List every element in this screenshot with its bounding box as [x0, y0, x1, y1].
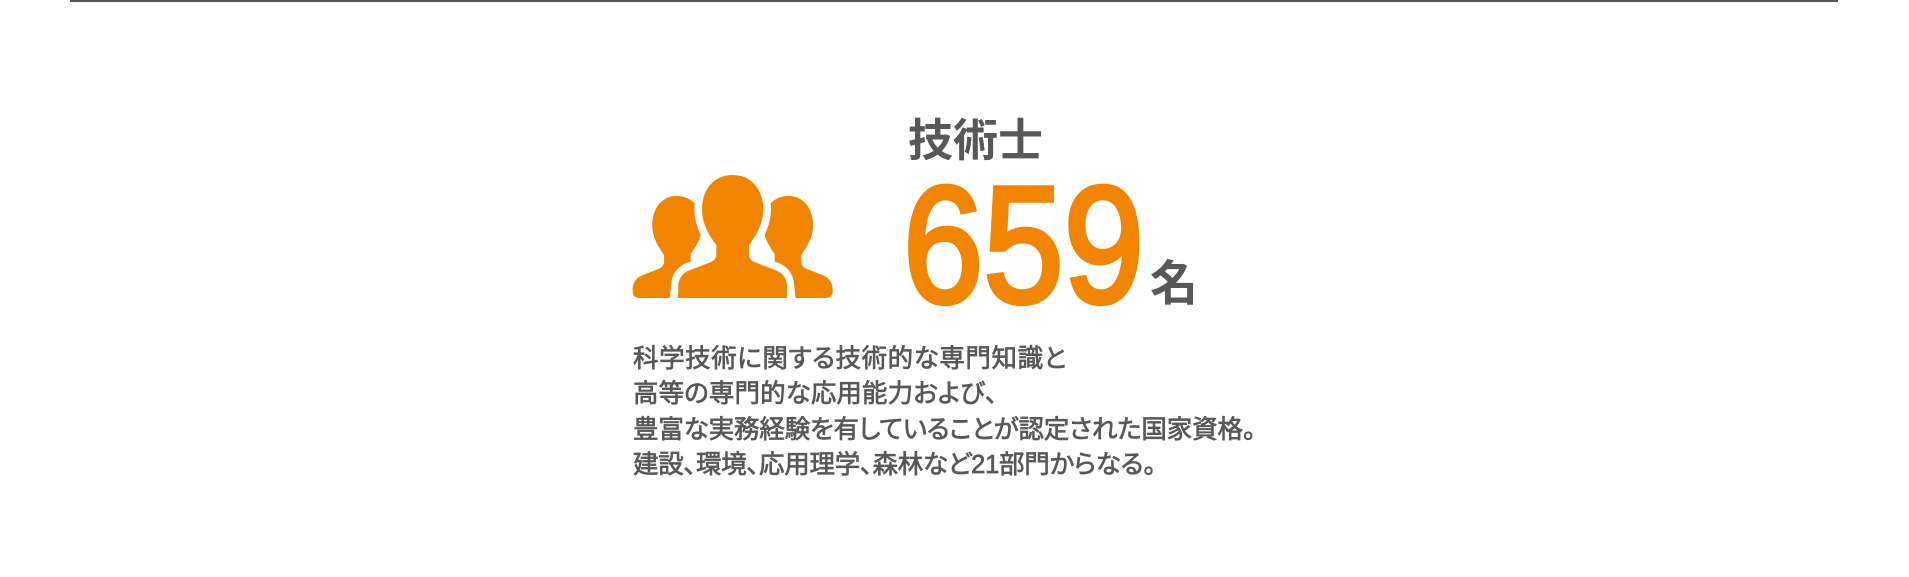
icon: three people — [632, 175, 833, 298]
description text: 高等の専門的な応用能力および、 — [633, 380, 998, 408]
heading: 技術士: 技術士 — [908, 115, 1043, 166]
description text — [633, 344, 1255, 479]
description text: 豊富な実務経験を有していることが認定された国家資格。 — [633, 416, 1255, 444]
description text: 建設、環境、応用理学、森林など21部門からなる。 — [633, 451, 1156, 479]
unit: 名: 名 — [1150, 258, 1198, 311]
top rule — [70, 0, 1838, 2]
description text: 科学技術に関する技術的な専門知識と — [633, 345, 1067, 373]
figure: 659: 659 — [903, 153, 1144, 338]
